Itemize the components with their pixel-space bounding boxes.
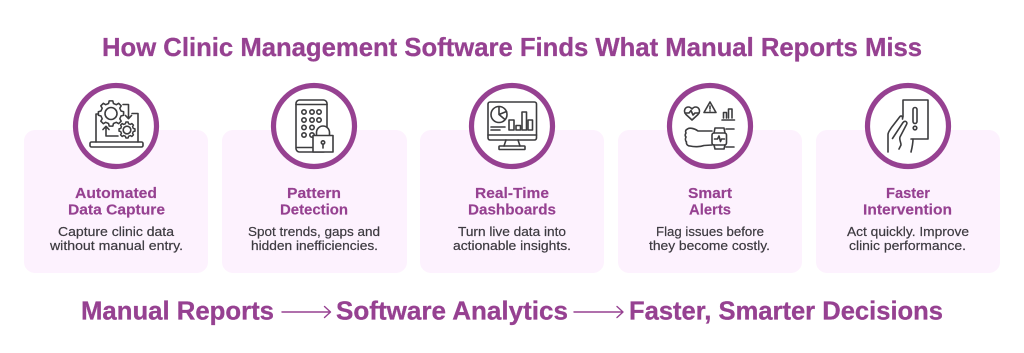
panel: faster intervention	[816, 86, 1000, 273]
heading: Automated	[75, 185, 157, 202]
flow label: manual reports: Manual Reports	[81, 296, 274, 326]
arrow	[282, 306, 330, 318]
heading: Detection	[280, 202, 348, 218]
description: clinic performance.	[849, 238, 966, 253]
heading: Alerts	[689, 202, 731, 218]
description	[49, 224, 183, 253]
heading: Faster	[886, 185, 930, 202]
heading	[688, 185, 732, 218]
description: Flag issues before	[656, 224, 764, 239]
panel: automated data capture	[24, 86, 208, 273]
description: they become costly.	[649, 238, 770, 253]
bottom flow	[81, 296, 943, 326]
description: Spot trends, gaps and	[248, 224, 380, 239]
panel: real-time dashboards	[420, 86, 604, 273]
heading: Data Capture	[68, 202, 165, 218]
description: actionable insights.	[453, 238, 571, 253]
description: without manual entry.	[49, 238, 183, 253]
heading: Real-Time	[475, 185, 549, 202]
description: Capture clinic data	[58, 224, 175, 239]
description: Turn live data into	[458, 224, 566, 239]
icon: smartwatch with health alerts	[685, 102, 734, 149]
title: How Clinic Management Software Finds What Manual Reports Miss	[102, 32, 922, 62]
icon: keypad phone with padlock	[296, 100, 333, 152]
description: hidden inefficiencies.	[251, 238, 378, 253]
heading: Intervention	[863, 202, 952, 218]
icon: laptop with gears	[90, 101, 143, 147]
icon: monitor with charts	[488, 102, 536, 150]
flow label: software analytics: Software Analytics	[336, 296, 568, 326]
heading: Smart	[688, 185, 732, 202]
description: Act quickly. Improve	[847, 224, 969, 239]
icon: hand holding alert card	[888, 100, 928, 152]
panel: pattern detection	[222, 86, 407, 273]
flow label: faster, smarter decisions: Faster, Smarter Decisions	[629, 296, 943, 326]
heading	[468, 185, 556, 218]
heading	[863, 185, 952, 218]
arrow	[574, 306, 623, 318]
heading	[68, 185, 165, 218]
description	[453, 224, 571, 253]
heading: Pattern	[287, 185, 341, 202]
heading	[280, 185, 348, 218]
panel: smart alerts	[618, 86, 802, 273]
description	[847, 224, 969, 253]
description	[649, 224, 770, 253]
description	[248, 224, 380, 253]
heading: Dashboards	[468, 202, 556, 218]
